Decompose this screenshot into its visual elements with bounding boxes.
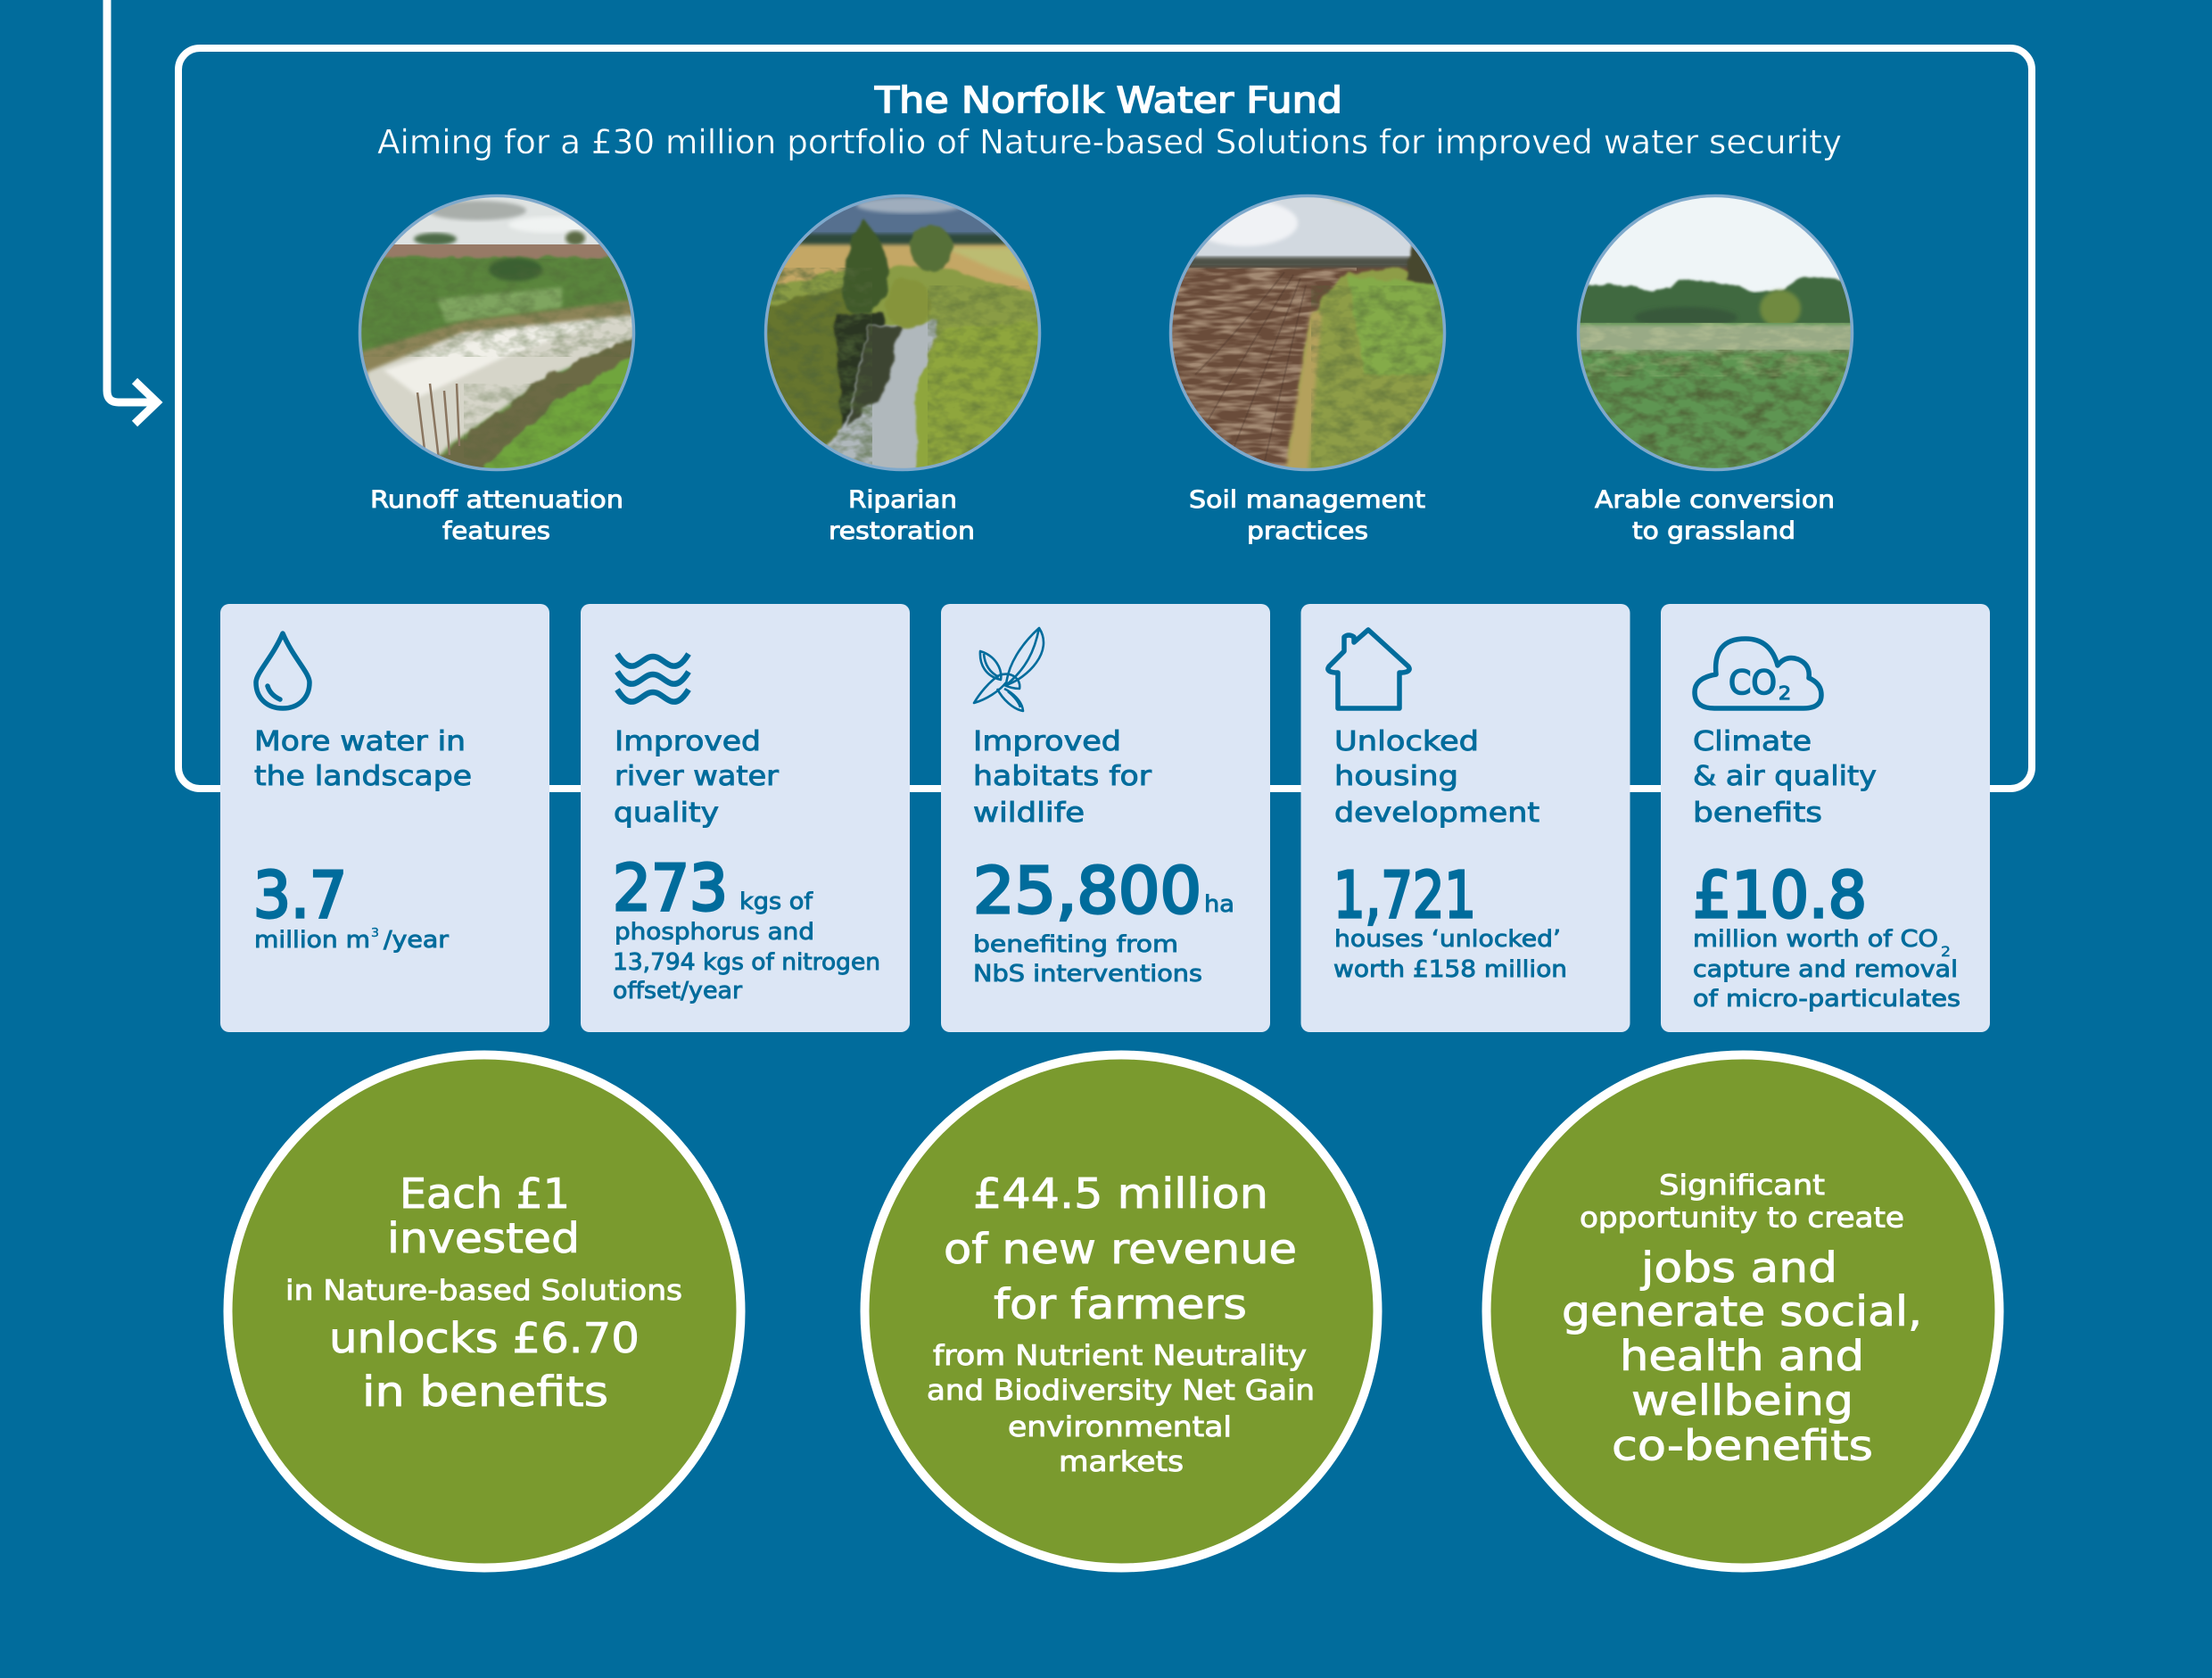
description: benefiting from <box>973 931 1178 958</box>
description <box>1693 926 1960 1013</box>
callout: £1 unlocks £6.70: invested <box>387 1214 580 1262</box>
callout: £44.5 million new revenue: of new revenue <box>944 1225 1297 1273</box>
arrow into the fund panel <box>107 0 157 424</box>
description: million worth of CO <box>1693 926 1938 953</box>
callout: jobs and co-benefits: generate social, <box>1562 1287 1922 1335</box>
label: runoff attenuation features <box>370 486 623 545</box>
heading: Climate <box>1693 726 1812 757</box>
icon: CO2 cloud <box>1695 639 1821 708</box>
heading: More water in <box>254 726 466 757</box>
label: soil management practices: practices <box>1247 517 1368 545</box>
statistic: 273: 273 <box>613 851 728 925</box>
label: runoff attenuation features: Runoff attenuation <box>370 486 623 514</box>
statistic: 25,800 ha: 25,800 <box>973 854 1201 928</box>
callout: £44.5 million new revenue: £44.5 million <box>973 1170 1268 1218</box>
photo: riparian restoration <box>765 195 1044 481</box>
description <box>1333 926 1567 983</box>
callout: jobs and co-benefits: jobs and <box>1640 1244 1837 1292</box>
panel: four nature-based solution photos <box>352 189 1860 545</box>
heading: housing <box>1334 761 1458 792</box>
statistic: £10.8: £10.8 <box>1693 858 1867 932</box>
heading <box>254 726 472 792</box>
callout: jobs and co-benefits: wellbeing <box>1631 1376 1853 1425</box>
description: of micro-particulates <box>1693 986 1960 1013</box>
description: worth £158 million <box>1333 956 1567 983</box>
description: NbS interventions <box>973 961 1202 988</box>
heading: the landscape <box>254 761 472 792</box>
label: soil management practices: Soil management <box>1189 486 1425 514</box>
description <box>254 927 450 954</box>
heading: river water <box>615 761 779 792</box>
callout: £1 unlocks £6.70 <box>228 1054 740 1568</box>
photo: runoff attenuation features <box>352 195 642 481</box>
callout: £44.5 million new revenue: from Nutrient Neutrality <box>933 1340 1307 1372</box>
heading: development <box>1334 798 1539 829</box>
heading: Improved <box>973 726 1121 757</box>
icon: water waves <box>617 654 689 702</box>
title: The Norfolk Water Fund <box>874 80 1342 121</box>
callout: £44.5 million new revenue: and Biodiversity Net Gain <box>927 1375 1315 1407</box>
description: 13,794 kgs of nitrogen <box>613 949 880 976</box>
callout: £44.5 million new revenue: environmental <box>1008 1411 1232 1443</box>
heading <box>1334 726 1539 829</box>
callout: £1 unlocks £6.70: unlocks £6.70 <box>329 1314 640 1362</box>
label: arable conversion to grassland: Arable conversion <box>1595 486 1835 514</box>
callout: jobs and co-benefits <box>1486 1054 2000 1568</box>
callout: jobs and co-benefits: Significant <box>1659 1170 1825 1202</box>
description: offset/year <box>613 978 743 1004</box>
photo: soil management practices <box>1169 189 1454 481</box>
description <box>613 889 880 1004</box>
subtitle: Aiming for a £30 million portfolio of Nature-based Solutions for improved water security <box>377 123 1842 161</box>
label: arable conversion to grassland: to grassland <box>1632 517 1795 545</box>
heading: habitats for <box>973 761 1152 792</box>
label: soil management practices <box>1189 486 1425 545</box>
icon: water drop <box>256 633 310 708</box>
description: houses ‘unlocked’ <box>1334 926 1561 953</box>
statistic: 25,800 ha: ha <box>1204 891 1234 918</box>
card: improved river water quality <box>581 604 910 1032</box>
callout: jobs and co-benefits: health and <box>1620 1332 1864 1380</box>
callout: £1 unlocks £6.70: in Nature-based Solutions <box>285 1275 682 1307</box>
label: riparian restoration <box>829 486 975 545</box>
heading: Unlocked <box>1334 726 1479 757</box>
photo: arable conversion to grassland <box>1570 195 1860 476</box>
heading: Improved <box>615 726 761 757</box>
icon: bird and leaves <box>974 628 1044 711</box>
heading <box>1693 726 1877 829</box>
label: runoff attenuation features: features <box>442 517 550 545</box>
icon: CO2 cloud: 2 <box>1779 682 1791 704</box>
label: riparian restoration: Riparian <box>848 486 957 514</box>
description: kgs of <box>739 889 813 915</box>
heading: wildlife <box>973 798 1085 829</box>
callout: £44.5 million new revenue: for farmers <box>994 1280 1247 1328</box>
description: phosphorus and <box>615 919 814 946</box>
callout: jobs and co-benefits: opportunity to create <box>1580 1203 1904 1235</box>
callout: £44.5 million new revenue: markets <box>1059 1446 1184 1478</box>
icon: house <box>1328 630 1409 708</box>
callout: £1 unlocks £6.70: in benefits <box>362 1368 608 1416</box>
heading <box>973 726 1152 829</box>
card: climate and air quality benefits <box>1661 604 1990 1032</box>
heading: & air quality <box>1693 761 1877 792</box>
callout: jobs and co-benefits: co-benefits <box>1612 1422 1873 1470</box>
label: riparian restoration: restoration <box>829 517 975 545</box>
description: 2 <box>1941 943 1951 960</box>
statistic: 3.7: 3.7 <box>253 858 347 932</box>
icon: CO2 cloud: CO <box>1729 664 1777 702</box>
statistic: 1,721: 1,721 <box>1333 858 1476 932</box>
heading: benefits <box>1693 798 1822 829</box>
panel frame: The Norfolk Water Fund <box>178 48 2032 789</box>
description: 3 <box>371 927 379 940</box>
heading <box>614 726 779 829</box>
description: /year <box>384 927 450 954</box>
heading: quality <box>614 798 719 829</box>
description: million m <box>254 927 370 954</box>
callout: £1 unlocks £6.70: Each £1 <box>400 1170 570 1218</box>
card: more water in the landscape <box>220 604 549 1032</box>
label: arable conversion to grassland <box>1595 486 1835 545</box>
description: capture and removal <box>1693 956 1958 983</box>
description <box>973 931 1202 988</box>
card: unlocked housing development <box>1300 604 1630 1032</box>
card: improved habitats for wildlife <box>941 604 1270 1032</box>
callout: £44.5 million new revenue <box>865 1054 1377 1568</box>
